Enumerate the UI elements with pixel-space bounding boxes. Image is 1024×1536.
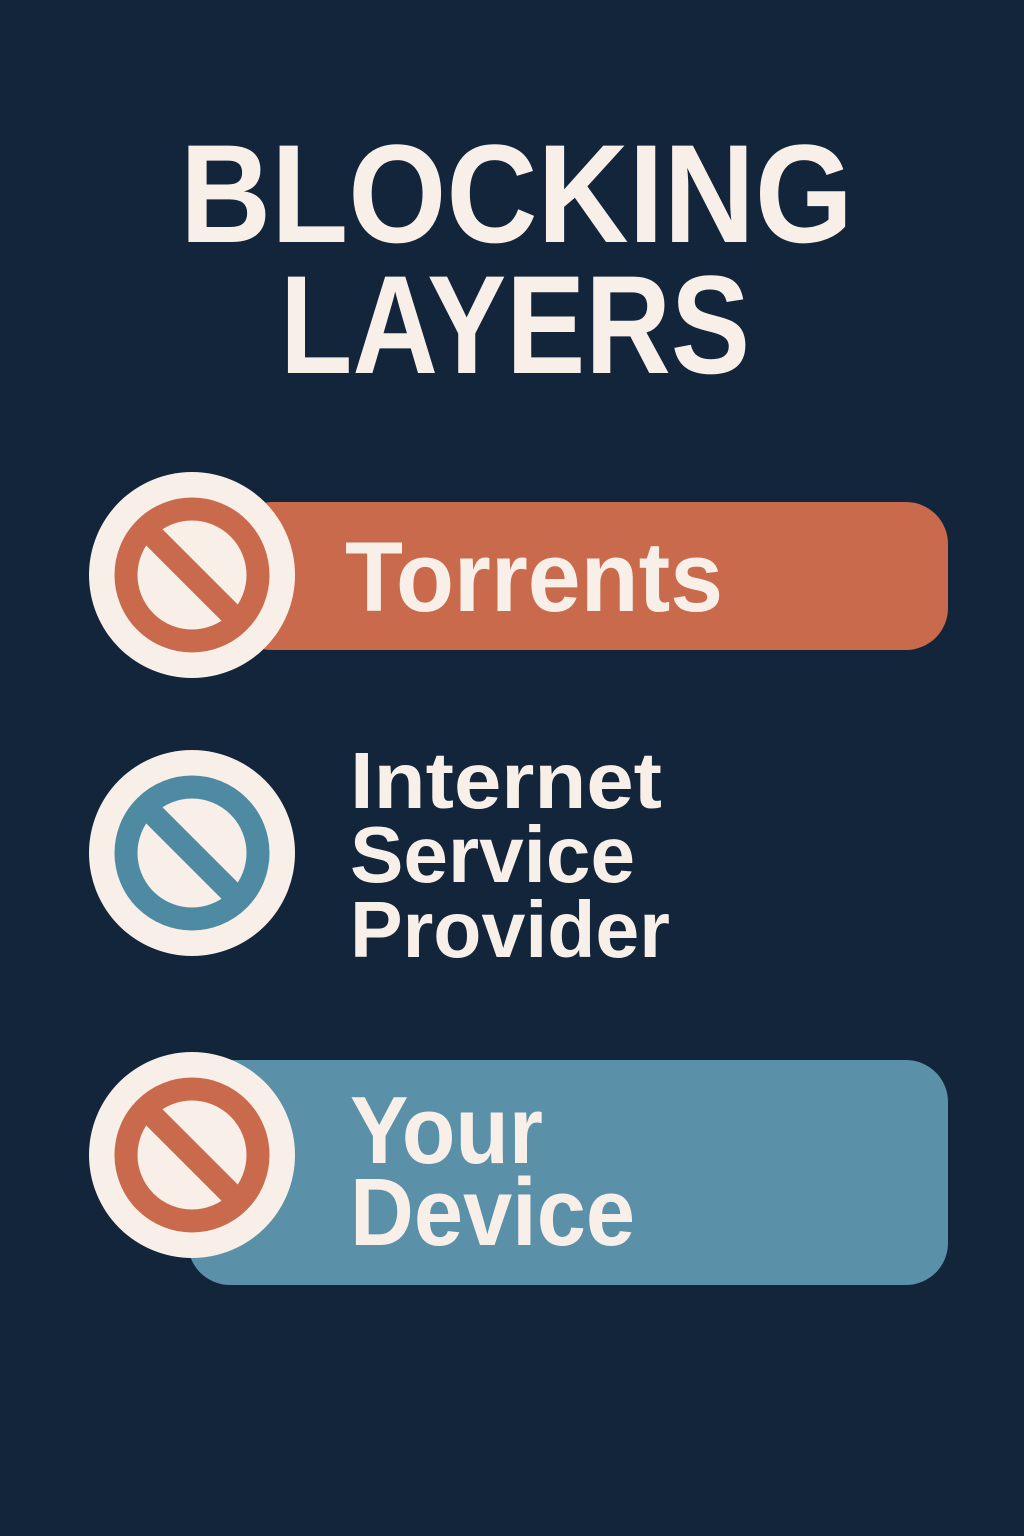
- panel: device: [89, 1052, 948, 1285]
- label: device: Your: [350, 1077, 543, 1184]
- icon: block blue: [89, 750, 295, 956]
- label: isp: [350, 736, 670, 974]
- title: [180, 115, 853, 403]
- label: isp: Service: [350, 810, 635, 899]
- icon: block orange 1: [89, 472, 295, 678]
- bar: torrents: [230, 502, 948, 650]
- bar: device: [188, 1060, 948, 1285]
- label: isp: Internet: [350, 736, 662, 825]
- title: BLOCKING: [180, 115, 853, 272]
- panel: torrents: [89, 472, 948, 678]
- title: LAYERS: [280, 246, 750, 403]
- panel: isp: [89, 736, 670, 974]
- label: device: Device: [350, 1159, 635, 1266]
- icon: block orange 2: [89, 1052, 295, 1258]
- label: torrents: Torrents: [345, 521, 723, 632]
- label: device: [350, 1077, 635, 1266]
- label: isp: Provider: [350, 885, 670, 974]
